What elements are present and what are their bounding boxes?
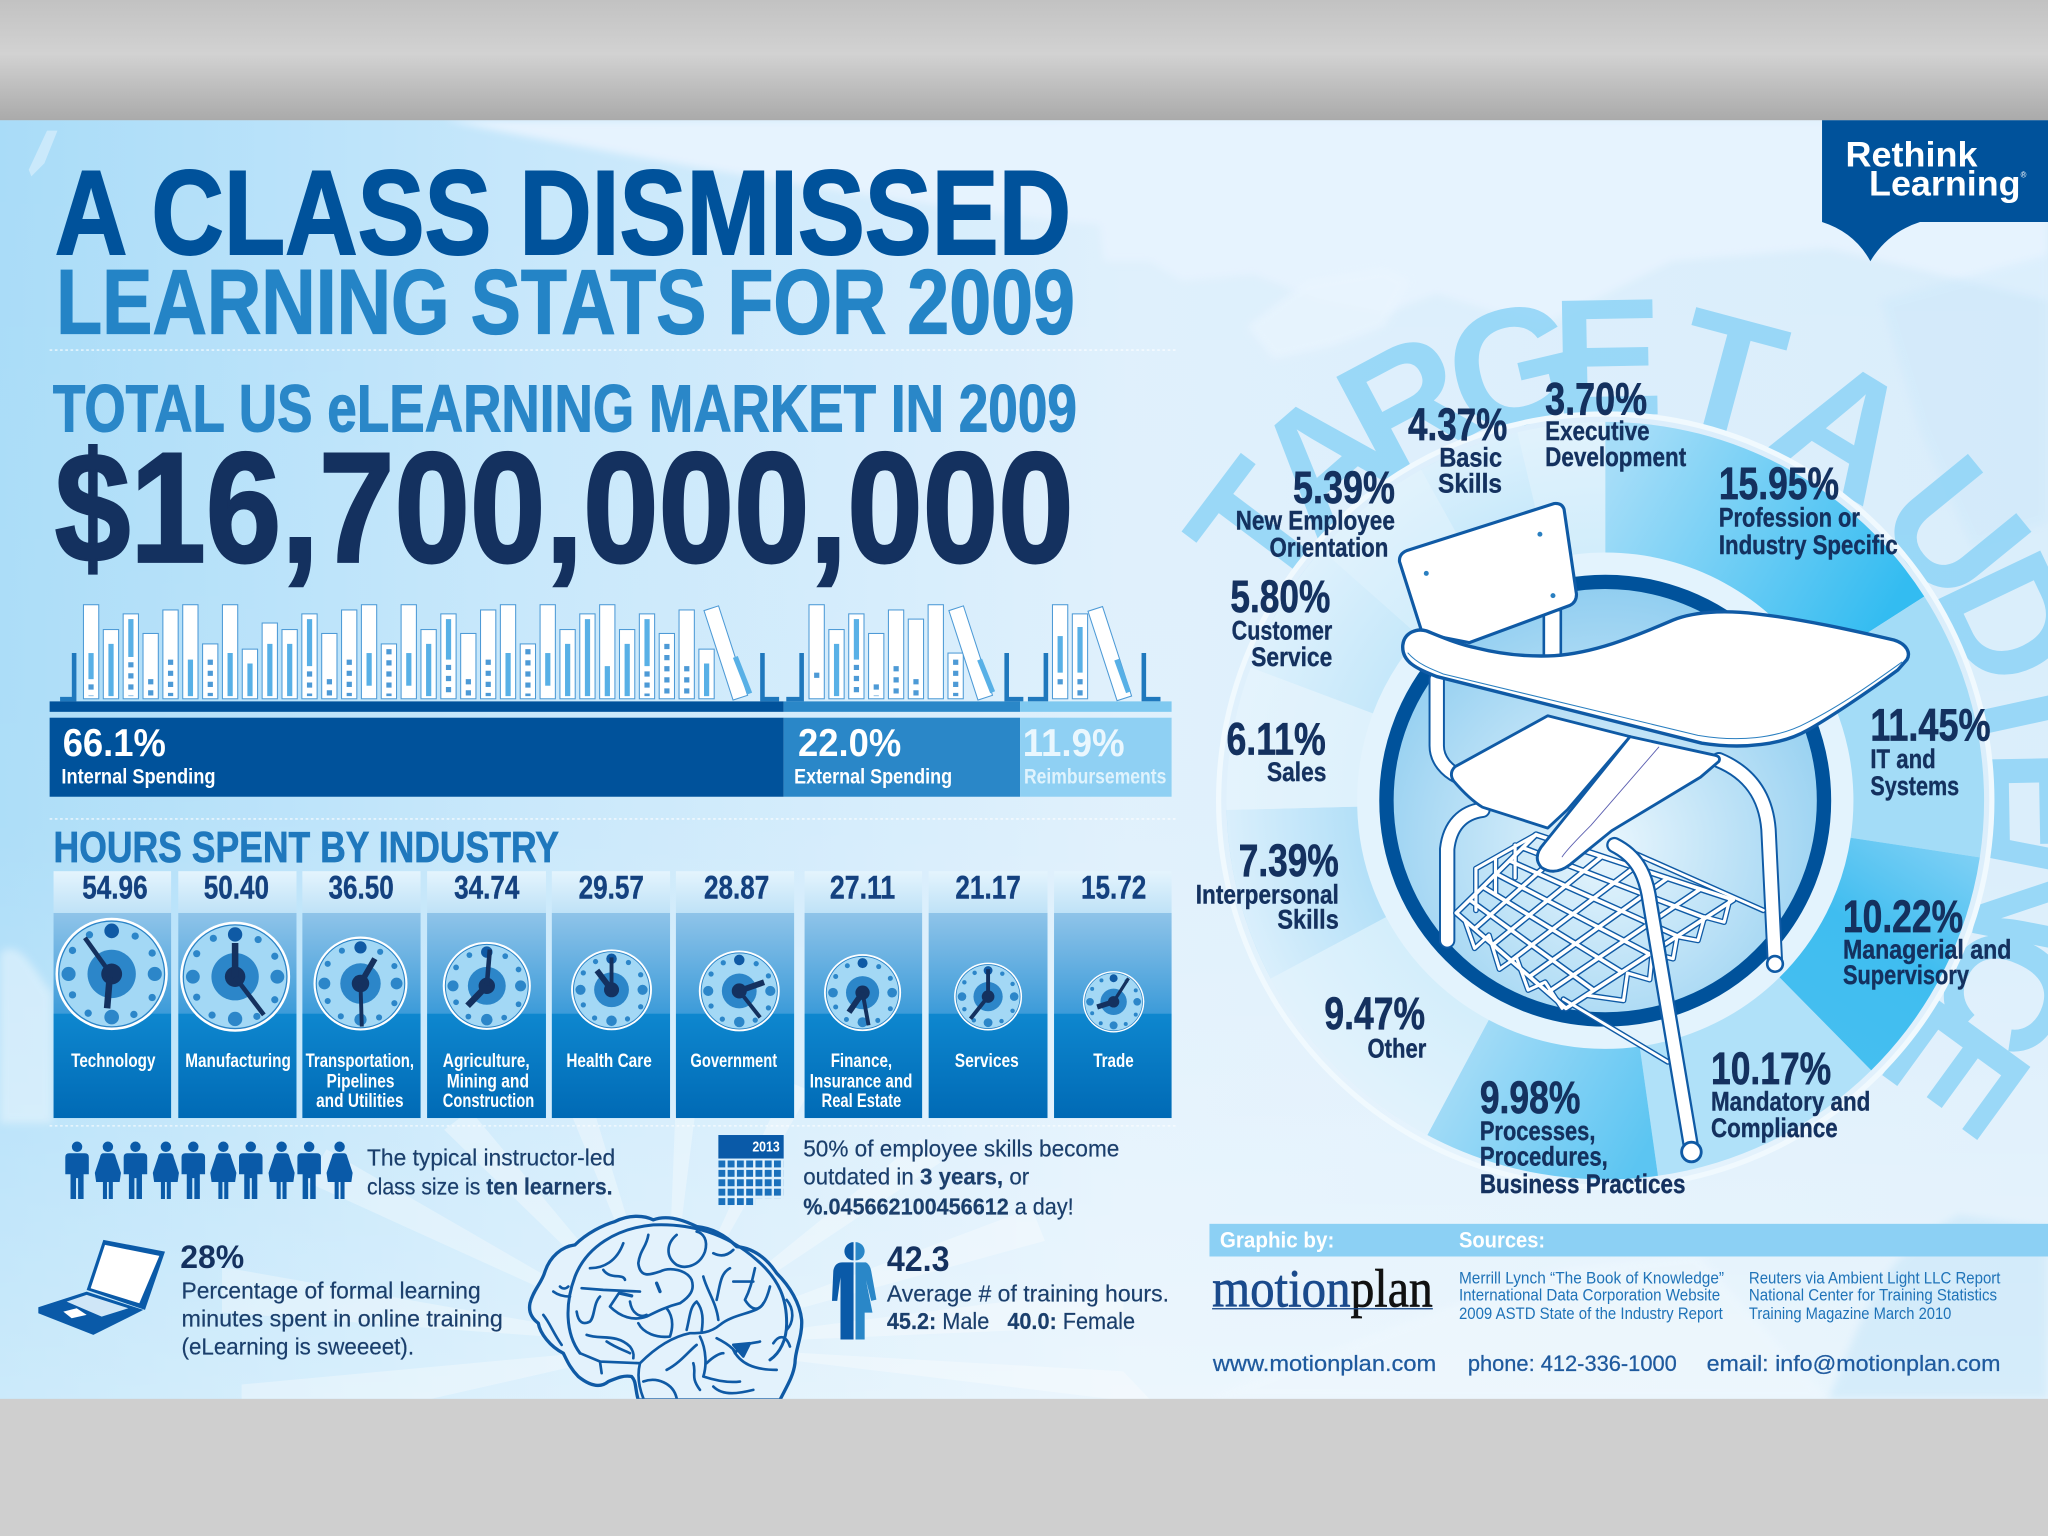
icon: calendar 2013: [718, 1135, 784, 1208]
stat: customer service: [1230, 571, 1333, 672]
stat: processes procedures business practices: Procedures,: [1480, 1142, 1608, 1172]
stat: new employee orientation: [1236, 462, 1395, 562]
slice: managerial and supervisory: [1779, 838, 1980, 1070]
contact details: email: info@motionplan.com: [1707, 1351, 2000, 1376]
column: transportation, pipelines and utilities: [302, 869, 421, 1118]
stat: processes procedures business practices: Business Practices: [1480, 1169, 1685, 1199]
text: training hours: 45.2: Male 40.0: Female: [887, 1308, 1135, 1334]
target audience pie ring: [1219, 414, 1992, 1187]
stat: managerial and supervisory: Supervisory: [1843, 960, 1969, 990]
text: training hours: [887, 1240, 1169, 1334]
column: services: Services: [955, 1051, 1019, 1072]
logo: motionplan: [1212, 1259, 1433, 1319]
slice: interpersonal skills: [1227, 807, 1386, 979]
slice: IT and systems: [1814, 597, 1984, 857]
stat: executive development: [1545, 374, 1686, 472]
column: government: 28.87: [704, 869, 769, 906]
segment: internal spending: 66.1%: [63, 722, 166, 765]
stat: basic skills: [1408, 399, 1507, 498]
contact details: phone: 412-336-1000: [1468, 1351, 1677, 1376]
column: agriculture, mining and construction: Mining and: [447, 1071, 529, 1092]
contact details: www.motionplan.com: [1212, 1351, 1436, 1376]
front leg: [1614, 845, 1701, 1162]
logo: Rethink Learning: Learning: [1869, 165, 2021, 204]
sources list: Merrill Lynch “The Book of Knowledge”: [1459, 1269, 1724, 1287]
stat: IT and systems: 11.45%: [1870, 700, 1991, 751]
column: finance, insurance and real estate: [805, 869, 922, 1118]
logo: motionplan: plan: [1351, 1259, 1433, 1319]
text: class size: class size is ten learners.: [367, 1174, 613, 1200]
text: training hours: 42.3: [887, 1240, 950, 1279]
column: finance, insurance and real estate: Real Estate: [822, 1091, 901, 1112]
stat: managerial and supervisory: 10.22%: [1843, 891, 1963, 942]
icon: calendar 2013: 2013: [752, 1139, 780, 1155]
stat: basic skills: 4.37%: [1408, 399, 1507, 450]
chair target ring: [1386, 582, 1824, 1019]
column: services: [929, 869, 1048, 1118]
stat: basic skills: Skills: [1438, 468, 1502, 498]
wire basket: [1456, 835, 1763, 1062]
subtitle: LEARNING STATS FOR 2009: [56, 252, 1075, 354]
segment: reimbursements: 11.9%: [1023, 722, 1125, 765]
column: health care: Health Care: [566, 1051, 652, 1072]
column: technology: Technology: [71, 1051, 156, 1072]
spending stacked bar: [50, 701, 1172, 797]
segment: external spending: [784, 718, 1020, 797]
slice: executive development: [1517, 422, 1605, 559]
segment: reimbursements: Reimbursements: [1024, 766, 1166, 789]
stat: interpersonal skills: Skills: [1277, 905, 1339, 935]
text: training hours: Average # of training hours.: [887, 1280, 1169, 1306]
sources list: International Data Corporation Website: [1459, 1286, 1720, 1304]
stat: basic skills: Basic: [1439, 442, 1502, 472]
column: government: Government: [690, 1051, 778, 1072]
stat: processes procedures business practices: 9.98%: [1480, 1072, 1580, 1123]
footer credits band: Sources:: [1459, 1227, 1545, 1252]
text: class size: The typical instructor-led: [367, 1145, 615, 1171]
column: trade: 15.72: [1081, 869, 1146, 906]
stat: executive development: 3.70%: [1545, 374, 1647, 425]
column: manufacturing: [178, 869, 296, 1118]
desk support arm: [1537, 737, 1720, 871]
slice: sales: [1226, 667, 1373, 810]
bottom grey band: [0, 1399, 2048, 1536]
stat: processes procedures business practices: [1480, 1072, 1685, 1199]
stat: managerial and supervisory: [1843, 891, 2011, 990]
stat: other: 9.47%: [1324, 988, 1425, 1039]
column: agriculture, mining and construction: Construction: [443, 1091, 534, 1112]
stat: other: Other: [1368, 1034, 1427, 1064]
stat: mandatory and compliance: [1711, 1043, 1870, 1143]
footer credits band: Graphic by:: [1220, 1227, 1334, 1252]
heading: hours spent by industry: HOURS SPENT BY INDUSTRY: [54, 824, 559, 872]
bookends: [60, 653, 1160, 701]
sources list: National Center for Training Statistics: [1749, 1286, 1997, 1304]
stat: profession or industry specific: Industry Specific: [1719, 530, 1898, 560]
text: outdated skills: 50% of employee skills become: [803, 1136, 1119, 1162]
stat: sales: 6.11%: [1226, 713, 1326, 764]
stat: executive development: Development: [1545, 442, 1686, 472]
stat: profession or industry specific: [1719, 458, 1898, 560]
books: internal spending: [83, 605, 750, 700]
column: transportation, pipelines and utilities: Pipelines: [327, 1071, 394, 1092]
text: class size: [367, 1145, 615, 1200]
stat: customer service: Customer: [1232, 616, 1333, 646]
slice: profession or industry specific: [1605, 422, 1924, 667]
stat: customer service: 5.80%: [1230, 571, 1330, 622]
segment: external spending: External Spending: [794, 766, 952, 789]
logo: motionplan: motion: [1212, 1259, 1351, 1319]
column: health care: 29.57: [579, 869, 644, 906]
title: A CLASS DISMISSED: [55, 146, 1071, 280]
column: services: 21.17: [955, 869, 1021, 906]
stat: new employee orientation: 5.39%: [1293, 462, 1395, 513]
segment: internal spending: [50, 718, 784, 797]
stat: sales: Sales: [1267, 757, 1326, 787]
student desk chair illustration: [1399, 503, 1908, 1162]
text: online training: minutes spent in online training: [182, 1306, 503, 1332]
stat: new employee orientation: Orientation: [1270, 532, 1388, 562]
slice: other: [1271, 917, 1489, 1135]
heading: total market: TOTAL US eLEARNING MARKET IN 2009: [53, 373, 1077, 447]
stat: sales: [1226, 713, 1326, 787]
stat: IT and systems: Systems: [1870, 771, 1959, 801]
column: agriculture, mining and construction: [427, 869, 546, 1118]
stat: customer service: Service: [1251, 642, 1332, 672]
contact details: [1212, 1351, 2000, 1376]
stat: mandatory and compliance: Compliance: [1711, 1113, 1838, 1143]
text: outdated skills: [803, 1136, 1119, 1219]
stat: profession or industry specific: 15.95%: [1719, 458, 1839, 509]
books: reimbursements: [1052, 605, 1132, 701]
big number: market value: $16,700,000,000: [55, 421, 1074, 596]
bookshelf icon group: [60, 605, 1160, 701]
backrest: [1399, 503, 1576, 660]
column: finance, insurance and real estate: Finance,: [831, 1051, 892, 1072]
text: online training: 28%: [180, 1238, 244, 1275]
stat: profession or industry specific: Profession or: [1719, 502, 1860, 532]
sources list: Reuters via Ambient Light LLC Report: [1749, 1269, 2001, 1287]
icon: male and female figure: [832, 1242, 876, 1340]
column: agriculture, mining and construction: Agriculture,: [443, 1051, 530, 1072]
stat: IT and systems: IT and: [1870, 744, 1936, 774]
segment: internal spending: Internal Spending: [61, 766, 216, 789]
column: manufacturing: Manufacturing: [185, 1051, 291, 1072]
stat: mandatory and compliance: Mandatory and: [1711, 1087, 1870, 1117]
slice: processes: [1427, 1020, 1658, 1179]
logo: Rethink Learning: ®: [2021, 171, 2027, 180]
chair legs: [1437, 679, 1775, 964]
column: transportation, pipelines and utilities: Transportation,: [306, 1051, 414, 1072]
column: technology: 54.96: [82, 869, 148, 906]
stat: IT and systems: [1870, 700, 1991, 801]
column: manufacturing: 50.40: [204, 869, 269, 906]
segment: reimbursements: [1020, 718, 1172, 797]
sources list: 2009 ASTD State of the Industry Report: [1459, 1305, 1723, 1323]
sunburst rays behind brain: [222, 1081, 1149, 1399]
top grey band: [0, 0, 2048, 120]
desk top: [1403, 612, 1908, 746]
column: trade: [1054, 869, 1172, 1118]
icon: brain: [530, 1216, 802, 1400]
column: transportation, pipelines and utilities: 36.50: [328, 869, 394, 906]
slice: customer service: [1251, 550, 1419, 713]
text: outdated skills: outdated in 3 years, or: [803, 1164, 1029, 1190]
sources list: Training Magazine March 2010: [1749, 1305, 1951, 1323]
stat: interpersonal skills: Interpersonal: [1196, 879, 1339, 909]
sources list: [1459, 1269, 2001, 1323]
stat: executive development: Executive: [1545, 416, 1650, 446]
text: online training: Percentage of formal learning: [182, 1277, 481, 1303]
footer credits band: [1209, 1224, 2048, 1256]
stat: new employee orientation: New Employee: [1236, 505, 1395, 535]
slice: basic skills: [1421, 432, 1548, 584]
stat: processes procedures business practices: Processes,: [1480, 1116, 1595, 1146]
text: online training: [180, 1238, 503, 1359]
stat: managerial and supervisory: Managerial and: [1843, 934, 2011, 964]
text: outdated skills: %.045662100456612 a day!: [803, 1193, 1074, 1219]
stat: mandatory and compliance: 10.17%: [1711, 1043, 1831, 1094]
column: health care: [552, 869, 670, 1118]
segment: external spending: 22.0%: [798, 722, 901, 765]
column: finance, insurance and real estate: Insurance and: [810, 1071, 912, 1092]
slice: mandatory and compliance: [1640, 977, 1871, 1176]
icon: laptop: [38, 1240, 165, 1335]
column: transportation, pipelines and utilities: and Utilities: [316, 1091, 404, 1112]
column: trade: Trade: [1093, 1051, 1134, 1072]
column: finance, insurance and real estate: 27.11: [830, 869, 895, 906]
column: government: [676, 869, 794, 1118]
logo: Rethink Learning: [1822, 120, 2048, 261]
stat: interpersonal skills: 7.39%: [1239, 835, 1339, 886]
column: technology: [54, 869, 171, 1118]
logo: Rethink Learning: Rethink: [1846, 136, 1978, 175]
books: external spending: [809, 605, 993, 700]
slice: new employee orientation: [1322, 470, 1485, 636]
icon: ten learners row: [65, 1142, 353, 1199]
column: agriculture, mining and construction: 34.74: [454, 869, 519, 906]
seat: [1451, 716, 1630, 828]
stat: other: [1324, 988, 1427, 1064]
stat: interpersonal skills: [1196, 835, 1339, 935]
text: online training: (eLearning is sweeeet).: [182, 1333, 414, 1359]
